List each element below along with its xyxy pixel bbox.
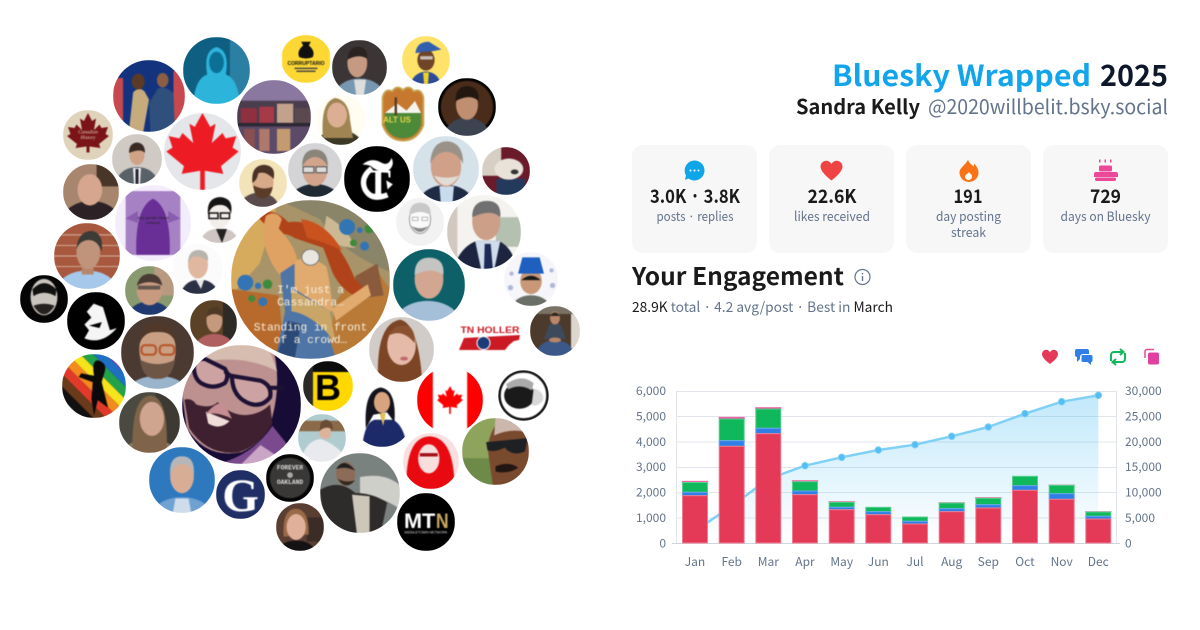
avatar: ink drawing of man with glasses (202, 196, 236, 243)
title: 2025 (1100, 53, 1168, 95)
card: day posting streak: streak (951, 222, 987, 241)
card: likes received: 22.6K (808, 182, 857, 209)
avatar: Cassandra painting: Standing in front (254, 322, 367, 334)
avatar: two people handshake with flags (113, 60, 185, 132)
avatar: New York Times T (344, 146, 410, 212)
avatar: MTN logo: N (436, 510, 449, 533)
avatar: man in plaid shirt (190, 300, 237, 347)
chart: monthly engagement (636, 382, 1162, 570)
avatar: Alt US park service badge (380, 86, 426, 142)
avatar: Cassandra painting: I'm just a (277, 285, 344, 297)
card: posts and replies: 3.0K · 3.8K (650, 182, 741, 209)
avatar: Corruptario logo: CORRUPTARIO (287, 61, 325, 67)
engagement summary: 28.9K total · 4.2 avg/post · Best in March (632, 297, 893, 317)
avatar: white ship on black (67, 292, 125, 350)
avatar: man sitting cross-legged (530, 306, 580, 356)
avatar: yellow B logo: B (315, 367, 341, 408)
month labels: Dec (1088, 553, 1109, 570)
avatar: Corruptario logo (281, 35, 331, 83)
avatar: MTN logo (397, 493, 455, 551)
bars (682, 407, 1111, 543)
avatar: bearded man with glasses (239, 159, 287, 207)
heading: your engagement: Your Engagement (631, 257, 844, 292)
avatar: Cassandra painting: Cassandra… (277, 298, 344, 310)
right axis labels: 30,000 (1125, 382, 1162, 399)
avatar: smiling woman with blonde hair (316, 95, 366, 145)
user name and handle (796, 91, 1168, 120)
icon: repost (1111, 349, 1125, 365)
panel: stat cards (632, 145, 1168, 253)
avatar: red-haired woman (369, 317, 434, 382)
avatar: man in dark coat (320, 453, 400, 533)
avatar: canadian history maple leaf (63, 110, 113, 160)
avatar: man in black ring (438, 78, 496, 136)
month labels: Mar (758, 553, 779, 570)
avatar: Alt US park service badge: ALT US (383, 116, 411, 125)
right axis labels: 5,000 (1125, 509, 1155, 526)
avatar: woman red posterized (403, 433, 459, 489)
avatar: purple long hair from behind: violence (146, 221, 160, 225)
right axis labels: 25,000 (1125, 408, 1162, 424)
avatar: TN Holler logo (458, 321, 522, 353)
avatar: purple long hair from behind: stop gender based (137, 216, 169, 220)
right axis labels (1125, 382, 1162, 552)
avatar: grey-haired man teal shingles (393, 249, 465, 321)
avatar: polar bear mascot (482, 147, 530, 195)
icon: like (1042, 350, 1058, 364)
avatar: woman in navy jacket (351, 385, 413, 447)
avatar: forever oakland: OAKLAND (277, 479, 303, 486)
avatar: yellow B logo (303, 361, 353, 411)
line points (802, 392, 1102, 469)
avatar: man with bow tie (182, 249, 216, 294)
avatar: pencil sketch of man (396, 198, 444, 246)
month labels: Feb (721, 553, 742, 570)
avatar: man in blue blazer (332, 40, 387, 95)
icon: reply (1075, 349, 1092, 365)
avatar: man in front of brick wall (54, 223, 120, 289)
avatar: man in blue party hat (504, 252, 558, 306)
avatar: woman with long hair (119, 392, 180, 453)
month labels (685, 553, 1109, 570)
avatar: canadian history maple leaf: Canadian (78, 130, 98, 136)
right axis labels: 0 (1125, 534, 1132, 552)
title: Bluesky Wrapped (832, 53, 1091, 95)
right axis labels: 15,000 (1125, 458, 1162, 475)
card: likes received (769, 145, 894, 253)
card: day posting streak (906, 145, 1031, 253)
card: day posting streak: day posting (936, 206, 1002, 225)
avatar: man in suit (112, 134, 162, 184)
card: days on Bluesky: 729 (1090, 182, 1121, 209)
avatar: hooded figure (183, 37, 250, 104)
avatar: bald man (63, 164, 119, 220)
month labels: May (830, 553, 854, 570)
card: days on Bluesky: days on Bluesky (1060, 206, 1151, 225)
left axis labels (636, 382, 666, 552)
avatar: forever oakland: FOREVER (277, 464, 303, 471)
icon: info (855, 270, 870, 284)
avatar: MTN logo: MT (404, 510, 436, 533)
left axis labels: 4,000 (636, 433, 666, 450)
avatar: forever oakland (266, 454, 314, 502)
avatar: pride silhouette (62, 354, 126, 418)
avatar: red maple leaf on grey (164, 113, 241, 190)
avatar: Cassandra painting (231, 200, 390, 359)
avatar: TN Holler logo: TN HOLLER (460, 325, 520, 336)
avatar: man in sunglasses (462, 418, 529, 485)
avatar cluster (20, 35, 580, 551)
card: day posting streak: 191 (954, 182, 982, 209)
icon: quote (1145, 350, 1159, 364)
month labels: Jan (685, 553, 705, 570)
avatar: man with glasses grey (288, 143, 342, 197)
user name and handle: Sandra Kelly (796, 91, 921, 120)
card: days on Bluesky (1043, 145, 1168, 253)
left axis labels: 6,000 (636, 382, 666, 399)
month labels: Aug (941, 553, 963, 570)
cumulative line (695, 395, 1098, 531)
left axis labels: 0 (659, 534, 666, 552)
avatar: MTN logo: MIDDLETOWN NETWORK (405, 531, 448, 535)
avatar: grey-haired man smiling (413, 136, 479, 202)
card: posts and replies (632, 145, 757, 253)
avatar: man on blue background (149, 447, 215, 513)
cumulative area (695, 395, 1098, 543)
chart legend icons (1042, 349, 1159, 365)
month labels: Apr (795, 553, 815, 570)
left axis labels: 5,000 (636, 408, 666, 424)
avatar: smiling man with glasses outdoors (125, 266, 174, 315)
card: likes received: likes received (794, 206, 870, 225)
right axis labels: 10,000 (1125, 484, 1162, 500)
card: posts and replies: posts · replies (656, 206, 734, 225)
avatar: purple long hair from behind (115, 185, 191, 261)
avatar: cartoon man in cap (402, 36, 450, 84)
avatar: Mark Carney in navy suit (447, 195, 521, 269)
avatar: large smiling man with glasses (182, 345, 301, 464)
avatar: woman in white at table (298, 414, 346, 462)
left axis labels: 3,000 (636, 458, 666, 475)
avatar: bride of Frankenstein (498, 370, 549, 421)
month labels: Oct (1015, 553, 1035, 570)
avatar: canadian history maple leaf: History (80, 136, 96, 141)
right axis labels: 20,000 (1125, 433, 1162, 450)
user name and handle: @2020willbelit.bsky.social (928, 91, 1168, 120)
avatar: man on black (20, 275, 68, 323)
avatar: woman smiling dark room (276, 503, 324, 551)
avatar: Canadian flag (417, 367, 483, 433)
avatar: Cassandra painting: of a crowd… (274, 335, 348, 347)
avatar: harbour town at dusk (237, 80, 311, 154)
month labels: Nov (1051, 553, 1074, 570)
left axis labels: 2,000 (636, 484, 666, 500)
avatar: New York Times T: T (366, 163, 391, 205)
left axis labels: 1,000 (636, 509, 666, 526)
month labels: Jul (906, 553, 924, 570)
avatar: man with orange glasses (121, 316, 194, 389)
month labels: Sep (978, 553, 999, 570)
month labels: Jun (868, 553, 889, 570)
